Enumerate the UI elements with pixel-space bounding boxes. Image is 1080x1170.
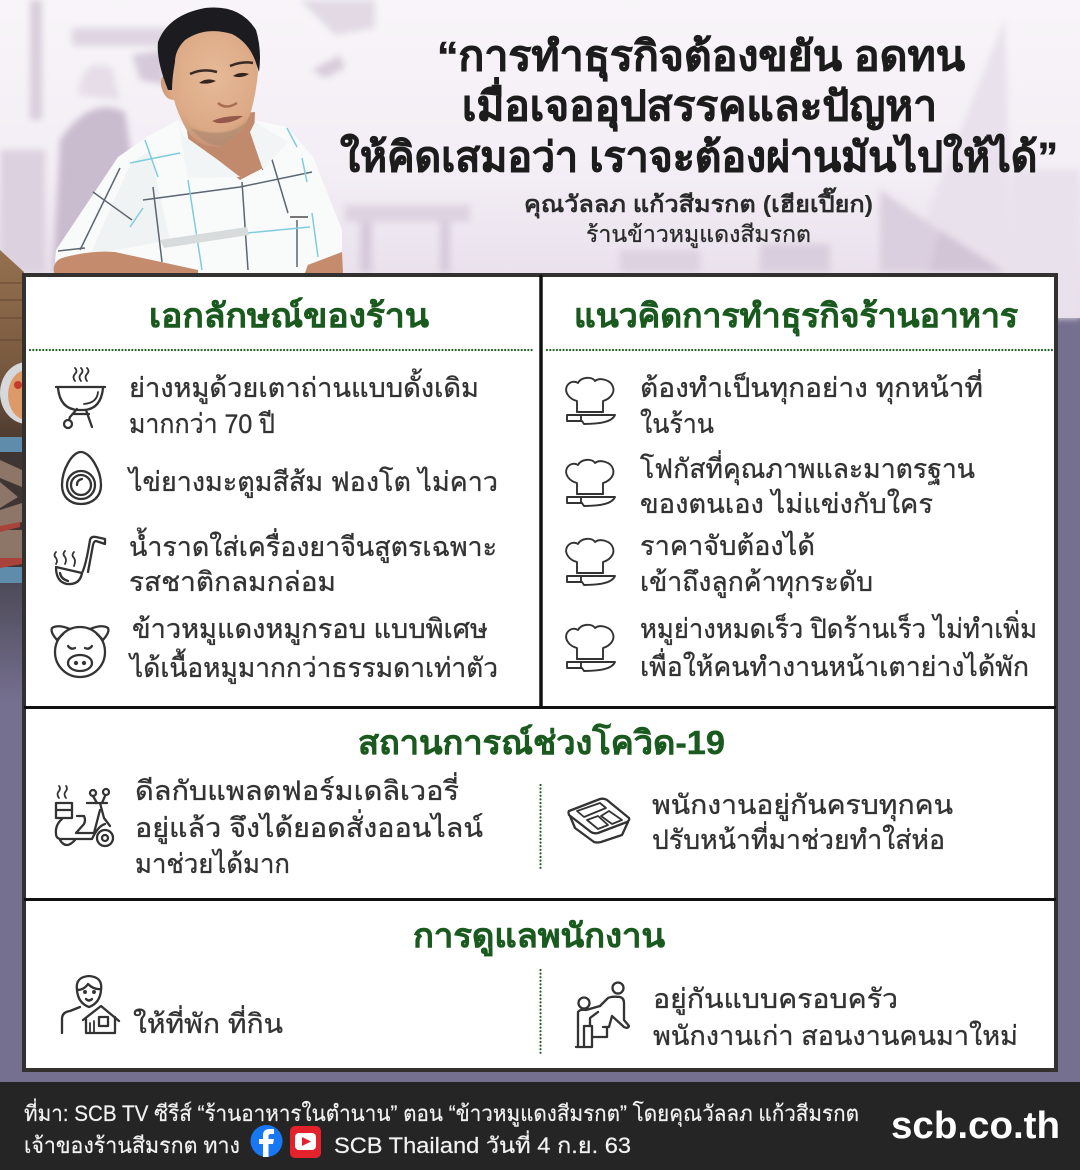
text: family atmosphere: อยู่กันแบบครอบครัว: [653, 984, 898, 1015]
text: concept 1: [640, 369, 983, 439]
quote attribution: คุณวัลลภ แก้วสีมรกต (เฮียเปี๊ยก): [524, 187, 873, 219]
heading: employee care: การดูแลพนักงาน: [413, 917, 665, 957]
shirt: [54, 120, 342, 273]
text: concept 2: [640, 450, 975, 519]
text: delivery platforms: ดีลกับแพลตฟอร์มเดลิเวอรี่: [135, 772, 459, 806]
source text: ที่มา: SCB TV ซีรีส์ “ร้านอาหารในตำนาน” ตอน “ข้าวหมูแดงสีมรกต” โดยคุณวัลลภ แก้วสีมรกต: [24, 1098, 859, 1127]
text: staff stay: [652, 790, 953, 855]
face: [161, 29, 258, 147]
text: concept 3: เข้าถึงลูกค้าทุกระดับ: [640, 567, 873, 599]
text: delivery platforms: มาช่วยได้มาก: [135, 849, 290, 879]
panel: employee care: [62, 917, 1018, 1051]
forearm: [54, 252, 198, 273]
quote heading: เมื่อเจออุปสรรคและปัญหา: [462, 77, 937, 132]
text: concept 3: ราคาจับต้องได้: [640, 531, 815, 561]
text: family atmosphere: [653, 984, 1018, 1051]
left food photo: wood table and plates: [0, 250, 54, 703]
heading: business concept: แนวคิดการทำธุรกิจร้านอาหาร: [574, 297, 1018, 337]
text: staff stay: ปรับหน้าที่มาช่วยทำใส่ห่อ: [652, 821, 945, 855]
text: egg: ไข่ยางมะตูมสีส้ม ฟองโต ไม่คาว: [127, 467, 498, 498]
icon: facebook: [250, 1125, 282, 1157]
footer bar: [0, 1082, 1080, 1170]
hair: [158, 7, 260, 90]
icon: chef hat and knife 2: [566, 460, 615, 506]
icon: soft boiled egg: [62, 452, 101, 504]
text: charcoal grilling: มากกว่า 70 ปี: [129, 409, 275, 439]
icon: delivery scooter: [56, 786, 113, 846]
text: concept 1: ในร้าน: [640, 408, 714, 439]
text: concept 2: โฟกัสที่คุณภาพและมาตรฐาน: [640, 450, 975, 486]
nose and mouth: [218, 103, 237, 106]
text: sauce: รสชาติกลมกล่อม: [129, 567, 336, 597]
main white panel: [24, 275, 1056, 1070]
text: delivery platforms: [135, 772, 483, 879]
text: pork: ข้าวหมูแดงหมูกรอบ แบบพิเศษ: [132, 614, 488, 645]
icon: person with house: [62, 976, 119, 1033]
quote heading: [340, 33, 1058, 180]
text: sauce: น้ำราดใส่เครื่องยาจีนสูตรเฉพาะ: [129, 527, 497, 563]
text: charcoal grilling: [129, 368, 479, 439]
panel: covid-19 situation: [56, 723, 953, 879]
icon: youtube: [290, 1126, 321, 1158]
text: pork: [128, 614, 498, 684]
collar: [178, 122, 288, 178]
icon: food box: [568, 799, 629, 842]
quote heading: ให้คิดเสมอว่า เราจะต้องผ่านมันไปให้ได้”: [340, 133, 1058, 180]
icon: chef hat and knife 1: [566, 378, 615, 424]
text: family atmosphere: พนักงานเก่า สอนงานคนมาใหม่: [653, 1020, 1018, 1051]
portrait: shop owner: [54, 7, 343, 273]
text: concept 2: ของตนเอง ไม่แข่งกับใคร: [640, 488, 933, 519]
quote attribution: ร้านข้าวหมูแดงสีมรกต: [586, 221, 811, 248]
text: pork: ได้เนื้อหมูมากกว่าธรรมดาเท่าตัว: [128, 648, 498, 684]
source channel and date: SCB Thailand วันที่ 4 ก.ย. 63: [334, 1130, 631, 1158]
text: sauce: [129, 527, 497, 597]
text: concept 3: [640, 531, 873, 599]
heading: covid-19 situation: สถานการณ์ช่วงโควิด-19: [358, 723, 725, 761]
quote heading: “การทำธุรกิจต้องขยัน อดทน: [437, 33, 965, 82]
icon: chef hat and knife 4: [566, 625, 615, 671]
icon: chef hat and knife 3: [566, 539, 615, 585]
website: scb.co.th: [891, 1105, 1060, 1147]
icon: colleague helping up stairs: [576, 982, 629, 1047]
text: concept 4: หมูย่างหมดเร็ว ปิดร้านเร็ว ไม่ทำเพิ่ม: [640, 610, 1037, 645]
icon: ladle with sauce: [54, 537, 105, 584]
text: delivery platforms: อยู่แล้ว จึงได้ยอดสั่งออนไลน์: [135, 809, 483, 844]
quote attribution: [524, 187, 873, 248]
text: staff stay: พนักงานอยู่กันครบทุกคน: [652, 790, 953, 822]
panel: business concept: [566, 297, 1037, 682]
text: concept 4: [640, 610, 1037, 682]
text: housing and food: ให้ที่พัก ที่กิน: [133, 1005, 283, 1039]
shirt plaid: [58, 132, 312, 270]
source text second line: เจ้าของร้านสีมรกต ทาง: [24, 1133, 240, 1158]
text: concept 1: ต้องทำเป็นทุกอย่าง ทุกหน้าที่: [640, 369, 983, 405]
icon: pig: [52, 626, 108, 677]
heading: shop highlights: เอกลักษณ์ของร้าน: [149, 297, 429, 334]
eyes and brows: [190, 62, 253, 74]
neck: [185, 112, 263, 180]
text: concept 4: เพื่อให้คนทำงานหน้าเตาย่างได้พัก: [640, 648, 1029, 682]
panel: shop highlights: [52, 297, 498, 684]
text: charcoal grilling: ย่างหมูด้วยเตาถ่านแบบดั้งเดิม: [129, 368, 479, 404]
icon: charcoal grill: [56, 368, 105, 428]
